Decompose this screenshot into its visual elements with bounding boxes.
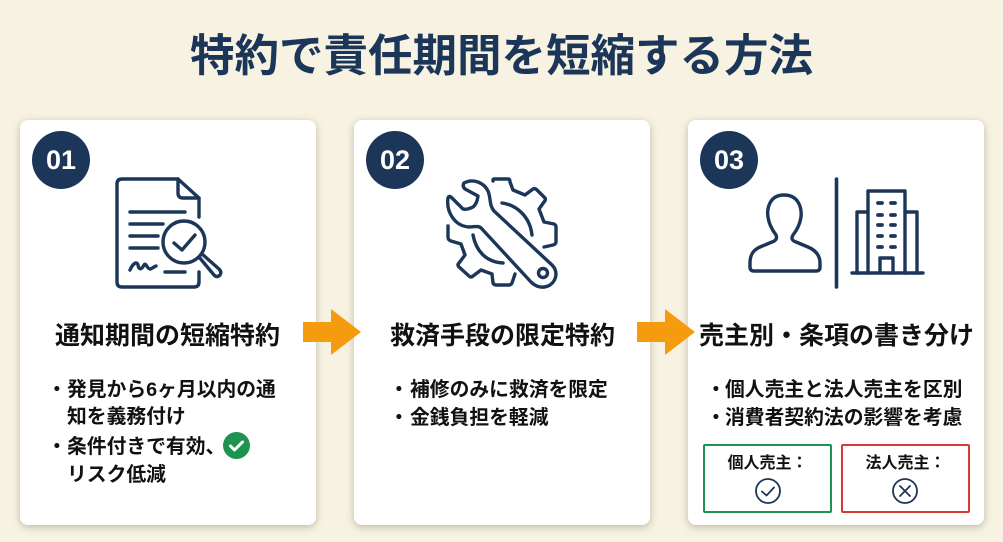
text block: card 1 bullets: ・	[47, 379, 67, 401]
text block: card 2 bullets: 金銭負担を軽減	[410, 407, 548, 429]
text block: card 3 bullets: 個人売主と法人売主を区別	[725, 379, 962, 401]
text block: card 3 bullets: ・	[706, 407, 726, 429]
heading 3: 売主別・条項の書き分け	[699, 322, 974, 350]
panel: card 3	[688, 120, 984, 525]
text block: card 1 bullets: 発見から6ヶ月以内の通	[67, 379, 276, 401]
text block: card 2 bullets: ・	[389, 407, 409, 429]
heading 1: 通知期間の短縮特約	[55, 322, 280, 350]
text block: card 3 bullets: ・	[706, 379, 726, 401]
text block: card 3 bullets: 消費者契約法の影響を考慮	[725, 407, 962, 429]
title: 特約で責任期間を短縮する方法	[190, 32, 813, 81]
arrow 2	[637, 309, 695, 355]
text block: card 1 bullets: ・	[47, 436, 67, 458]
box: corporate seller: 法人売主：	[865, 455, 946, 472]
arrow 1	[303, 309, 361, 355]
number badge 03: 03	[714, 145, 744, 175]
text block: card 1 bullets: 知を義務付け	[67, 406, 186, 428]
panel: card 1	[20, 120, 316, 525]
text block: card 1 bullets	[47, 378, 276, 486]
icon: wrench and gear	[446, 177, 558, 289]
text block: card 1 bullets: リスク低減	[67, 464, 166, 486]
number badge 01: 01	[46, 145, 76, 175]
heading 2: 救済手段の限定特約	[390, 322, 615, 350]
text block: card 3 bullets	[706, 378, 962, 429]
text block: card 2 bullets	[389, 378, 608, 429]
box: individual seller: 個人売主：	[727, 455, 808, 472]
number badge 02: 02	[380, 145, 410, 175]
panel: card 2	[354, 120, 650, 525]
icon: person and building	[748, 177, 925, 289]
icon: document with magnifier	[115, 177, 223, 289]
icon: green check	[223, 432, 250, 459]
text block: card 2 bullets: ・	[389, 379, 409, 401]
number badge 03	[700, 131, 758, 189]
number badge 02	[366, 131, 424, 189]
box: corporate seller	[841, 444, 970, 513]
box: individual seller	[703, 444, 832, 513]
text block: card 2 bullets: 補修のみに救済を限定	[410, 379, 608, 401]
number badge 01	[32, 131, 90, 189]
text block: card 1 bullets: 条件付きで有効、	[67, 436, 225, 458]
